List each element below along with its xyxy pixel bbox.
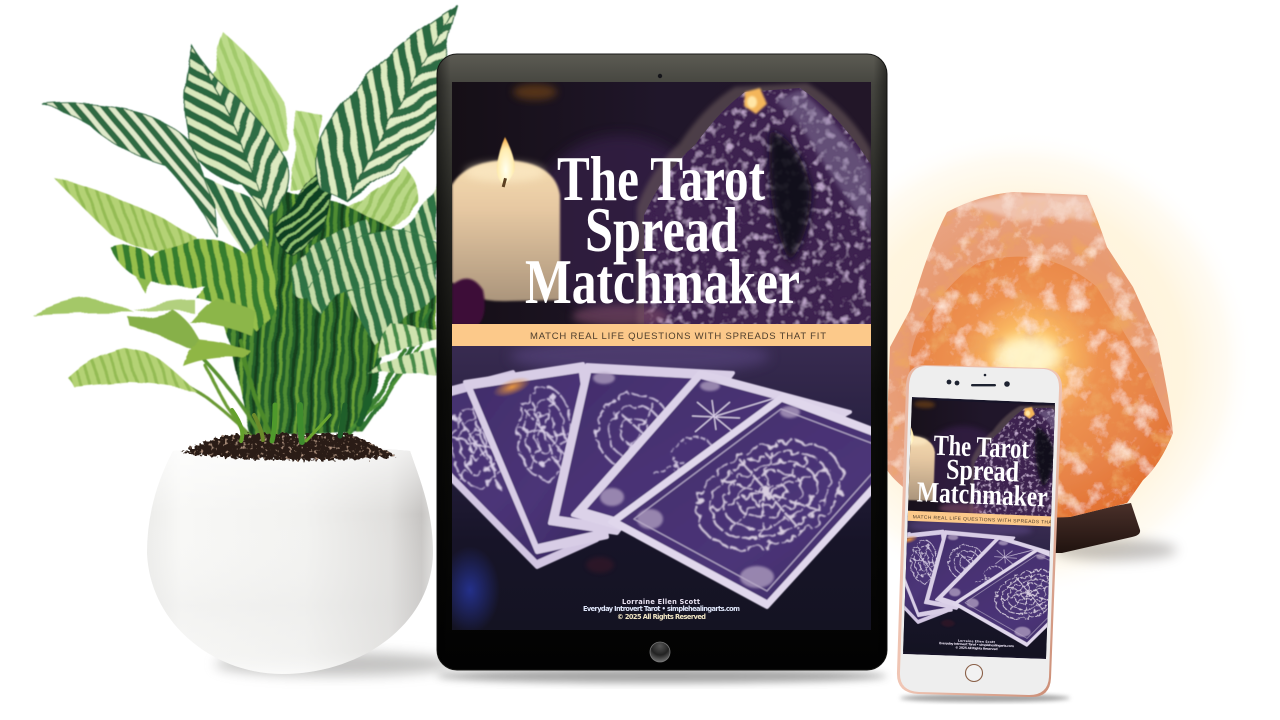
- phone dark backing: [903, 397, 1055, 659]
- back leaf: upper right striped: [400, 183, 437, 240]
- phone subtitle: MATCH REAL LIFE QUESTIONS WITH SPREADS THAT FIT: [913, 514, 1065, 526]
- cover footer: © 2025 All Rights Reserved: [617, 613, 706, 621]
- lamp glow: [785, 130, 1255, 600]
- lamp shadow: [1053, 539, 1177, 561]
- leaf: center lower pale: [190, 297, 256, 336]
- leaf: dark center: [274, 157, 334, 256]
- pot body: [147, 446, 433, 674]
- soil: [182, 434, 396, 460]
- tablet body: [437, 54, 887, 670]
- phone title: The Tarot: [933, 430, 1030, 465]
- leaf: right large striped: [307, 230, 437, 313]
- phone title: Matchmaker: [916, 477, 1048, 513]
- leaf: mid left: [128, 310, 202, 348]
- leaf: right lower one: [378, 323, 437, 361]
- phone title: [916, 435, 1048, 506]
- stem bases: [232, 405, 345, 442]
- cover title: [526, 156, 799, 304]
- back leaf: pale left: [53, 177, 210, 262]
- phone footer: © 2025 All Rights Reserved: [955, 646, 998, 651]
- plant: [32, 5, 457, 440]
- phone face: [900, 366, 1059, 695]
- phone footer: [939, 639, 1014, 650]
- leaf: center big: [185, 47, 289, 218]
- stem mass: [215, 190, 437, 436]
- lamp base: [1055, 503, 1140, 553]
- salt lamp: [887, 192, 1177, 561]
- back leaf: pale small: [290, 110, 323, 190]
- stems: [160, 310, 430, 440]
- phone body: [897, 365, 1062, 697]
- leaf: small drop: [136, 277, 152, 293]
- tablet screen: [452, 82, 871, 630]
- cover band: [452, 324, 871, 346]
- tablet home button: [650, 642, 670, 662]
- rock pale top: [960, 194, 1095, 222]
- leaf: thin left: [32, 298, 135, 315]
- rock front: [903, 257, 1173, 520]
- leaf: left striped: [43, 104, 218, 238]
- cover title: Spread: [585, 195, 738, 265]
- phone footer: Everyday Introvert Tarot • simplehealingarts.com: [939, 641, 1014, 648]
- leaf: right under striped: [345, 262, 437, 345]
- phone sensors: [947, 374, 1010, 387]
- phone screen: [903, 397, 1055, 659]
- leaf: right lower two: [367, 348, 437, 376]
- leaf: thin left two: [135, 299, 194, 313]
- phone home button: [966, 664, 982, 682]
- phone shadow: [900, 694, 1070, 702]
- tablet shadow: [437, 669, 887, 683]
- cover title: The Tarot: [557, 144, 765, 214]
- cover subtitle: MATCH REAL LIFE QUESTIONS WITH SPREADS THAT FIT: [530, 331, 826, 342]
- phone cover band: [908, 510, 1051, 526]
- leaf: lower left: [67, 347, 197, 392]
- rock hot core: [994, 336, 1062, 376]
- tablet edge shade: [437, 54, 887, 670]
- leaf: behind center: [200, 175, 268, 258]
- leaf: right big: [316, 5, 457, 201]
- leaf: lower mid: [183, 340, 250, 366]
- phone title: Spread: [946, 454, 1020, 488]
- cover footer: [583, 598, 740, 621]
- plant pot: [147, 405, 433, 674]
- phone cover text: [913, 435, 1051, 650]
- tablet camera: [658, 74, 662, 78]
- phone cover art: [903, 399, 1055, 658]
- pot light: [147, 446, 433, 674]
- cover footer: Lorraine Ellen Scott: [622, 598, 700, 606]
- cover art scene: [452, 82, 871, 630]
- cover footer: Everyday Introvert Tarot • simplehealingarts.com: [583, 605, 740, 613]
- cover title: Matchmaker: [525, 247, 800, 317]
- back leaf: pale right: [330, 167, 418, 237]
- rock back: [887, 192, 1173, 520]
- leaf: striped behind right: [290, 219, 370, 301]
- leaf: green lower left: [110, 240, 245, 287]
- phone: [897, 365, 1062, 697]
- pot shadow: [215, 652, 455, 676]
- tablet: [436, 54, 888, 670]
- back leaf: pale top: [205, 32, 289, 165]
- phone footer: Lorraine Ellen Scott: [958, 639, 996, 644]
- leaf: center lower striped: [195, 237, 276, 332]
